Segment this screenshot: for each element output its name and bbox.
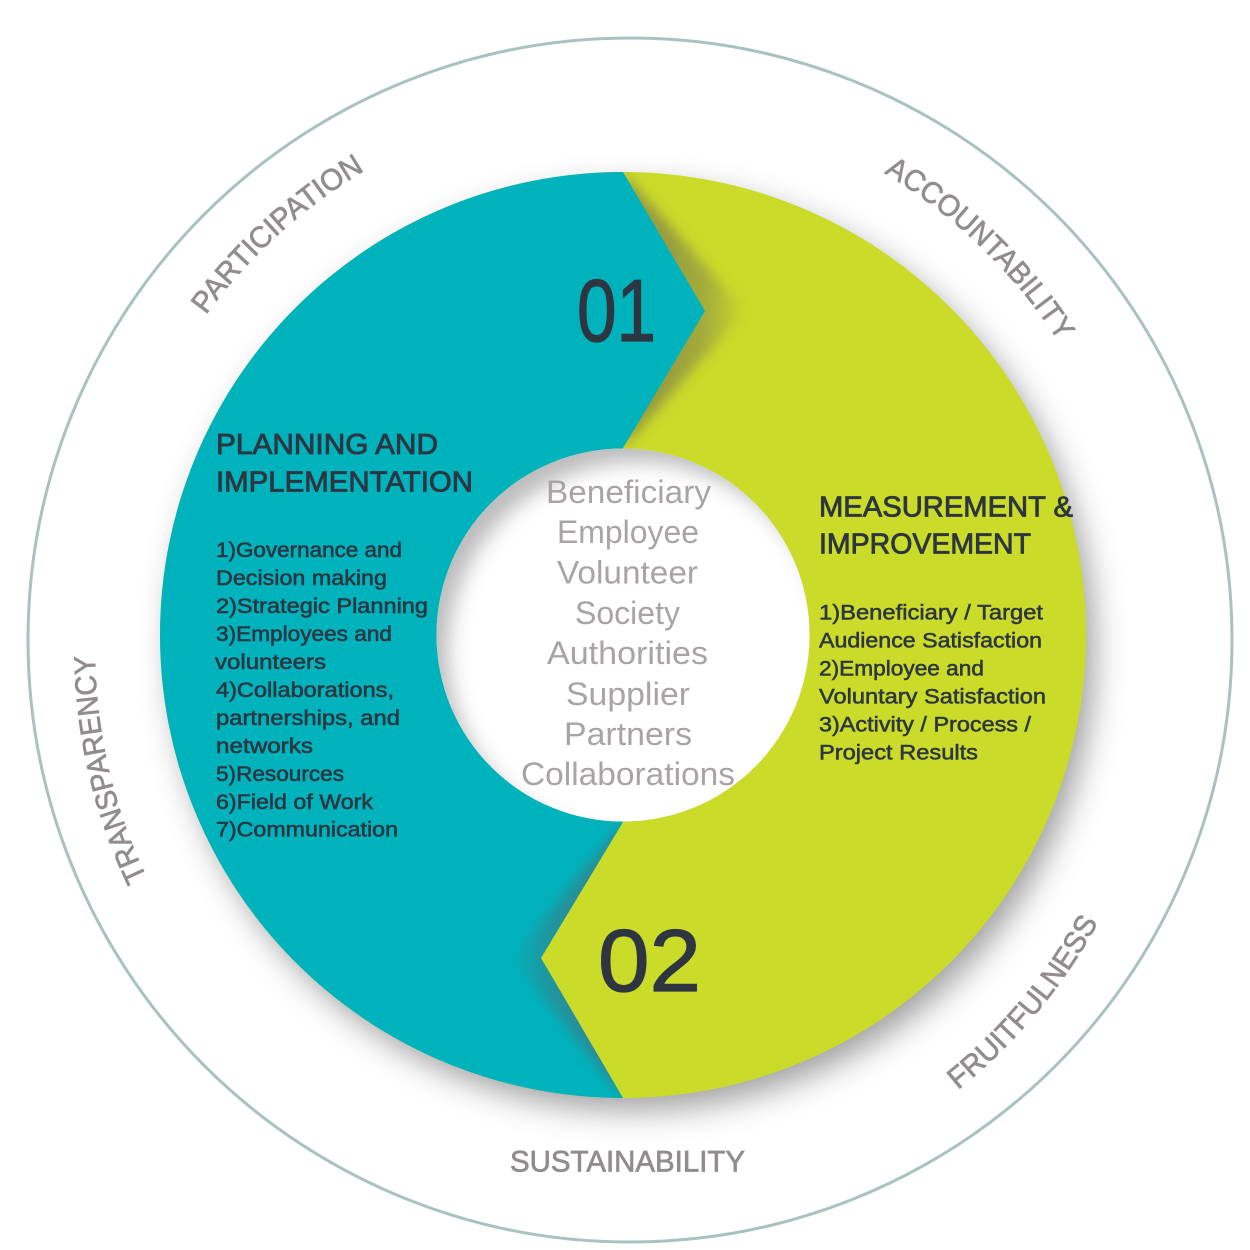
- text block: measurement list: [819, 602, 1046, 764]
- fold shadow under chevron 01: [623, 172, 745, 448]
- text block: stakeholders in centre circle: Supplier: [566, 676, 690, 712]
- text block: planning list: Decision making: [216, 567, 387, 590]
- text block: measurement list: Voluntary Satisfaction: [819, 686, 1046, 708]
- ring label: fruitfulness: FRUITFULNESS: [946, 915, 1096, 1089]
- disk drop shadow: [172, 188, 1094, 1110]
- text block: stakeholders in centre circle: Society: [575, 595, 680, 631]
- text block: planning list: 3)Employees and: [216, 623, 392, 646]
- text block: stakeholders in centre circle: Partners: [564, 716, 692, 752]
- number 02: 02: [598, 911, 701, 1010]
- segment: measurement and improvement (green): [160, 172, 1086, 1098]
- text block: planning list: volunteers: [215, 651, 326, 674]
- heading: planning and implementation: PLANNING AND: [216, 429, 438, 461]
- segment: planning and implementation (teal): [160, 172, 705, 1098]
- heading: measurement and improvement: MEASUREMENT &: [819, 492, 1073, 524]
- text block: planning list: 2)Strategic Planning: [216, 595, 428, 618]
- text block: planning list: 1)Governance and: [216, 539, 402, 562]
- text block: planning list: 6)Field of Work: [216, 791, 374, 814]
- ring label: accountability: ACCOUNTABILITY: [884, 159, 1076, 336]
- text block: planning list: 4)Collaborations,: [216, 679, 394, 702]
- text block: stakeholders in centre circle: Beneficiary: [546, 474, 711, 510]
- heading: measurement and improvement: IMPROVEMENT: [819, 528, 1031, 560]
- text block: planning list: [215, 539, 428, 842]
- text block: measurement list: Audience Satisfaction: [819, 630, 1042, 652]
- heading: measurement and improvement: [819, 492, 1073, 560]
- ring label: transparency: TRANSPARENCY: [74, 656, 144, 886]
- centre circle with inner shadow: [436, 448, 810, 822]
- text block: measurement list: Project Results: [819, 742, 978, 764]
- text block: planning list: 7)Communication: [216, 818, 398, 842]
- text block: stakeholders in centre circle: Collaborations: [521, 756, 735, 792]
- text block: stakeholders in centre circle: Employee: [557, 514, 699, 550]
- text block: planning list: 5)Resources: [216, 763, 344, 786]
- text block: stakeholders in centre circle: Volunteer: [557, 554, 698, 590]
- ring label: participation: PARTICIPATION: [190, 154, 364, 314]
- text block: measurement list: 1)Beneficiary / Target: [819, 602, 1043, 624]
- text block: planning list: networks: [216, 735, 313, 758]
- panel: central cycle disk: [160, 172, 1086, 1098]
- text block: planning list: partnerships, and: [216, 707, 400, 730]
- fold shadow under chevron 02: [520, 824, 622, 1096]
- text block: measurement list: 2)Employee and: [819, 658, 984, 680]
- ring label: sustainability: SUSTAINABILITY: [510, 1146, 745, 1178]
- heading: planning and implementation: [216, 429, 473, 498]
- text block: measurement list: 3)Activity / Process /: [819, 714, 1031, 736]
- text block: stakeholders in centre circle: Authorities: [547, 635, 708, 671]
- text block: stakeholders in centre circle: [521, 474, 735, 792]
- heading: planning and implementation: IMPLEMENTATION: [216, 466, 473, 498]
- number 01: 01: [577, 261, 656, 360]
